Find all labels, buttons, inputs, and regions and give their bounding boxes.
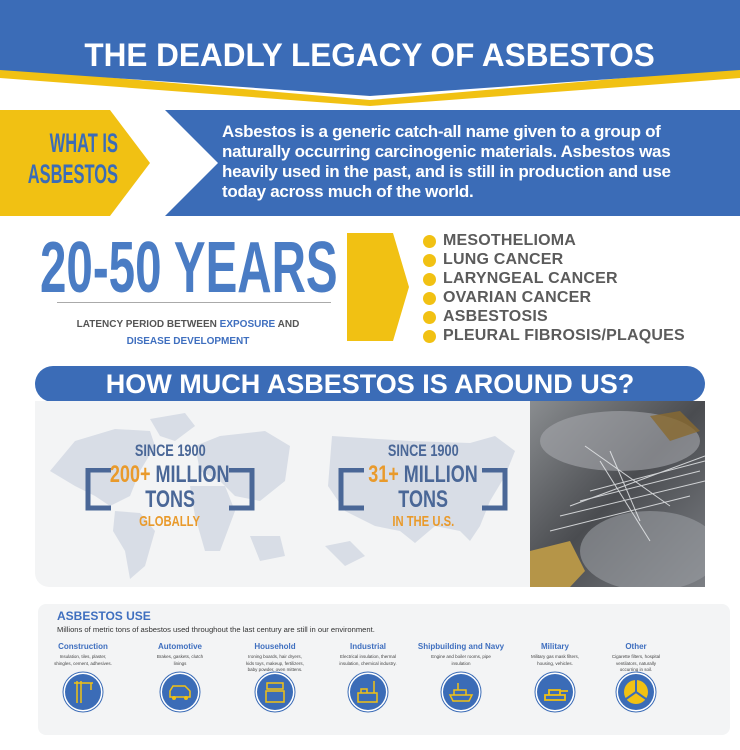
stat: usa: TONS bbox=[398, 486, 448, 513]
latency stat: DISEASE DEVELOPMENT bbox=[127, 336, 249, 347]
use: industrial: Industrial bbox=[350, 642, 386, 651]
list: diseases: ASBESTOSIS bbox=[443, 308, 548, 325]
list: diseases: LUNG CANCER bbox=[443, 251, 563, 268]
use: shipbuilding: Engine and boiler rooms, pipe bbox=[431, 654, 491, 659]
list: diseases: MESOTHELIOMA bbox=[443, 232, 576, 249]
map: world bbox=[50, 413, 290, 579]
stat: usa: IN THE U.S. bbox=[392, 513, 454, 530]
heading: what is asbestos: WHAT IS bbox=[50, 128, 118, 158]
map: usa bbox=[325, 436, 515, 566]
use: construction: shingles, cement, adhesives. bbox=[54, 660, 112, 666]
title: THE DEADLY LEGACY OF ASBESTOS bbox=[85, 37, 655, 73]
use: shipbuilding: insulation bbox=[451, 660, 470, 666]
panel: maps bbox=[35, 401, 535, 587]
latency stat: 20-50 YEARS bbox=[40, 228, 338, 308]
heading: how much asbestos bbox=[35, 366, 705, 402]
use: automotive bbox=[157, 642, 203, 712]
text block: definition bbox=[222, 122, 671, 201]
use: other: occurring in soil. bbox=[620, 667, 652, 672]
list: diseases: LARYNGEAL CANCER bbox=[443, 270, 618, 287]
use: automotive: Automotive bbox=[158, 642, 202, 651]
use: industrial bbox=[339, 642, 397, 712]
use: military: housing, vehicles. bbox=[537, 660, 573, 666]
stat: global: TONS bbox=[145, 486, 195, 513]
latency stat bbox=[40, 228, 338, 347]
arrow: yellow chevron bbox=[347, 233, 409, 341]
use: household: kids toys, makeup, fertilizers, bbox=[246, 660, 304, 666]
use: other bbox=[612, 642, 660, 712]
use: automotive: linings bbox=[174, 660, 186, 666]
list: diseases: PLEURAL FIBROSIS/PLAQUES bbox=[443, 327, 685, 344]
stat: usa bbox=[338, 441, 508, 530]
stat: global bbox=[86, 441, 254, 530]
stat: global: 200+ MILLION bbox=[110, 461, 230, 488]
heading: how much asbestos: HOW MUCH ASBESTOS IS AROUND US? bbox=[106, 369, 634, 399]
panel: asbestos use bbox=[38, 604, 730, 735]
use: industrial: Electrical insulation, thermal bbox=[340, 654, 396, 659]
use: construction: Construction bbox=[58, 642, 108, 651]
use: household: Household bbox=[254, 642, 296, 651]
list: diseases: OVARIAN CANCER bbox=[443, 289, 591, 306]
heading: what is asbestos: ASBESTOS bbox=[28, 159, 118, 189]
latency stat: LATENCY PERIOD BETWEEN EXPOSURE AND bbox=[77, 319, 299, 330]
heading: what is asbestos bbox=[28, 128, 118, 189]
use: construction bbox=[54, 642, 112, 712]
use: military: Military gas mask filters, bbox=[531, 654, 579, 659]
use: shipbuilding bbox=[418, 642, 504, 712]
panel: what is asbestos bbox=[0, 110, 740, 216]
stat: usa: 31+ MILLION bbox=[368, 461, 478, 488]
use: military: Military bbox=[541, 642, 569, 651]
photo: asbestos fibers bbox=[530, 401, 705, 587]
use: industrial: insulation, chemical industry. bbox=[339, 660, 397, 666]
text block: definition: naturally occurring carcinogenic materials. Asbestos was bbox=[222, 142, 670, 161]
stat: global: SINCE 1900 bbox=[135, 441, 205, 460]
text block: subtitle: Millions of metric tons of asbestos used throughout the last century are still in our environment. bbox=[57, 625, 375, 634]
use: military bbox=[531, 642, 579, 712]
list: diseases bbox=[423, 232, 685, 344]
stat: usa: SINCE 1900 bbox=[388, 441, 458, 460]
use: shipbuilding: Shipbuilding and Navy bbox=[418, 642, 504, 651]
use: automotive: Brakes, gaskets, clutch bbox=[157, 654, 203, 659]
use: household: baby powder, oven mittens. bbox=[248, 667, 302, 672]
text block: definition: Asbestos is a generic catch-all name given to a group of bbox=[222, 122, 661, 141]
use: construction: Insulation, tiles, plaster, bbox=[60, 654, 106, 659]
header banner bbox=[0, 0, 740, 106]
use: household: Ironing boards, hair dryers, bbox=[248, 654, 302, 659]
heading: asbestos use: ASBESTOS USE bbox=[57, 609, 151, 623]
use: other: ventilators, naturally bbox=[616, 660, 656, 666]
text block: definition: heavily used in the past, and is still in production and use bbox=[222, 162, 671, 181]
use: household bbox=[246, 642, 304, 712]
use: other: Cigarette filters, hospital bbox=[612, 654, 660, 659]
use: other: Other bbox=[625, 642, 647, 651]
text block: definition: today across much of the world. bbox=[222, 182, 473, 201]
stat: global: GLOBALLY bbox=[140, 513, 200, 530]
